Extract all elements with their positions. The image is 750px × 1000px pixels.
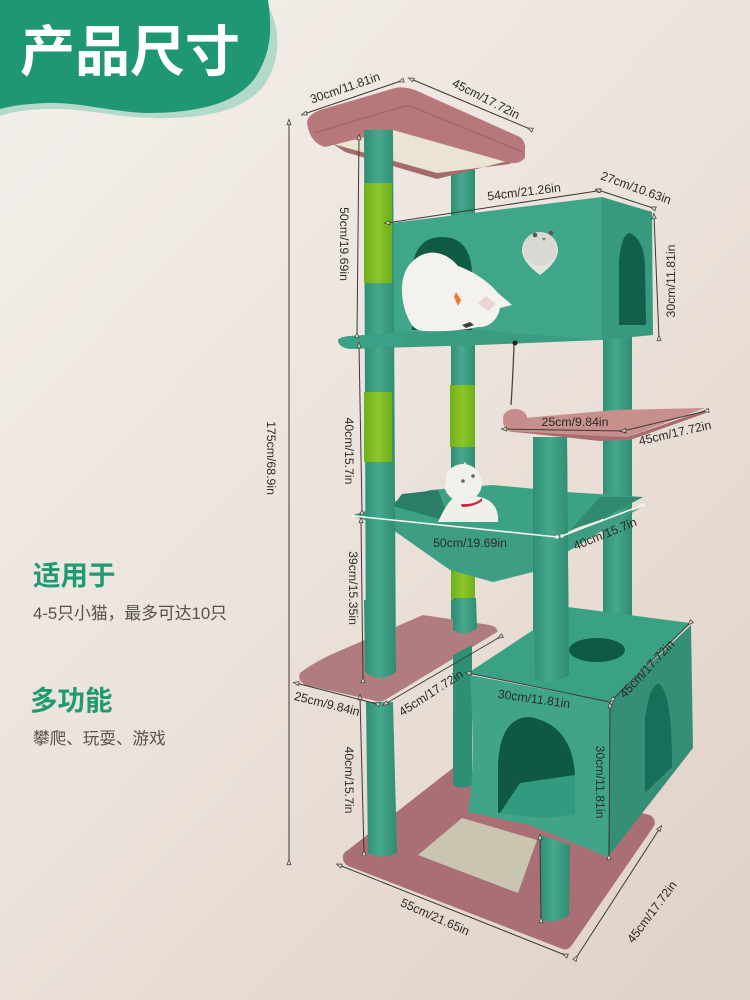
- dimension: box depth: 45cm/17.72in: [617, 637, 677, 701]
- shelf: [338, 330, 600, 349]
- left main post: [364, 130, 396, 680]
- dimension: hammock width: [353, 516, 557, 550]
- text block: multi-function: [30, 685, 166, 748]
- dimension: left perch length: [385, 637, 500, 719]
- lower box: [468, 437, 693, 857]
- dimension: top depth: [411, 76, 530, 129]
- side arch: [645, 683, 672, 793]
- title: 产品尺寸: [20, 21, 240, 83]
- hammock: [353, 485, 643, 582]
- scratch pad: [418, 818, 537, 893]
- top hole: [569, 638, 625, 662]
- rear post on perch: [453, 598, 477, 634]
- text block: suitable for: 4-5只小猫，最多可达10只: [33, 604, 227, 623]
- dimension: house height: [654, 216, 678, 338]
- header banner: [0, 0, 277, 118]
- under-box post: [540, 835, 570, 922]
- dimension: upper post: 50cm/19.69in: [337, 207, 351, 281]
- upper shelf front: [338, 331, 405, 349]
- base board: [343, 768, 655, 949]
- dimension: under-box post: [540, 837, 541, 920]
- dimension: right perch width: 25cm/9.84in: [542, 415, 609, 429]
- right pink perch: [503, 408, 706, 441]
- lower post under perch: [366, 702, 397, 856]
- peek hole with cat: [522, 231, 558, 275]
- dimension: hammock width: 50cm/19.69in: [433, 536, 507, 550]
- rear post below perch: [453, 645, 472, 788]
- dimension: lower-mid post: 39cm/15.35in: [346, 551, 360, 625]
- text block: multi-function: 攀爬、玩耍、游戏: [33, 729, 166, 748]
- dimension: top width: [304, 69, 401, 114]
- dimension: bottom post: 40cm/15.7in: [342, 746, 356, 814]
- dimension: box height: 30cm/11.81in: [593, 746, 607, 819]
- dimension: bottom post: [342, 697, 364, 853]
- dimension: base width: [339, 865, 565, 955]
- text block: suitable for: [33, 560, 227, 623]
- cat tree illustration: [299, 87, 706, 949]
- dimension: left perch width: [293, 683, 377, 719]
- dimension: house height: 30cm/11.81in: [664, 244, 678, 317]
- dimension: base depth: 45cm/17.72in: [624, 878, 680, 946]
- dimension: house width: [387, 181, 597, 223]
- dimension: right perch width: [504, 415, 623, 431]
- upper house: [338, 197, 653, 349]
- dimension: top depth: 45cm/17.72in: [450, 76, 522, 122]
- dimension: right perch length: [623, 411, 713, 448]
- dimension: top width: 30cm/11.81in: [308, 69, 382, 106]
- front arch: [498, 717, 575, 813]
- left pink perch: [299, 598, 497, 702]
- right rear post: [603, 335, 632, 635]
- right front post upper: [533, 437, 569, 680]
- dimension: mid post: 40cm/15.7in: [342, 418, 356, 485]
- left post on perch: [364, 600, 396, 678]
- dimension: base width: 55cm/21.65in: [398, 896, 472, 938]
- text block: suitable for: 适用于: [33, 560, 116, 591]
- dimension: left perch length: 45cm/17.72in: [396, 667, 466, 719]
- house door: [412, 237, 472, 330]
- dimension: mid post: [342, 345, 362, 512]
- dimension: left perch width: 25cm/9.84in: [293, 689, 361, 719]
- dimension: hammock depth: [562, 505, 643, 553]
- top perch: [307, 87, 525, 179]
- house side door: [619, 233, 646, 325]
- dimension: right perch length: 45cm/17.72in: [637, 418, 713, 448]
- dimension: box width: 30cm/11.81in: [497, 687, 571, 711]
- rope toy: [511, 340, 518, 405]
- hammock cat: [437, 462, 498, 522]
- rear post: [450, 160, 475, 635]
- dimension: house depth: 27cm/10.63in: [599, 169, 673, 207]
- dimension: box depth: [612, 623, 690, 701]
- dimension: house width: 54cm/21.26in: [487, 181, 562, 203]
- dimension: base depth: [576, 828, 680, 958]
- dimension: overall height: 175cm/68.9in: [264, 421, 278, 495]
- cat on shelf: [402, 253, 512, 331]
- dimension: hammock depth: 40cm/15.7in: [571, 515, 639, 553]
- text block: multi-function: 多功能: [30, 685, 112, 716]
- dimension: box width: [468, 673, 610, 711]
